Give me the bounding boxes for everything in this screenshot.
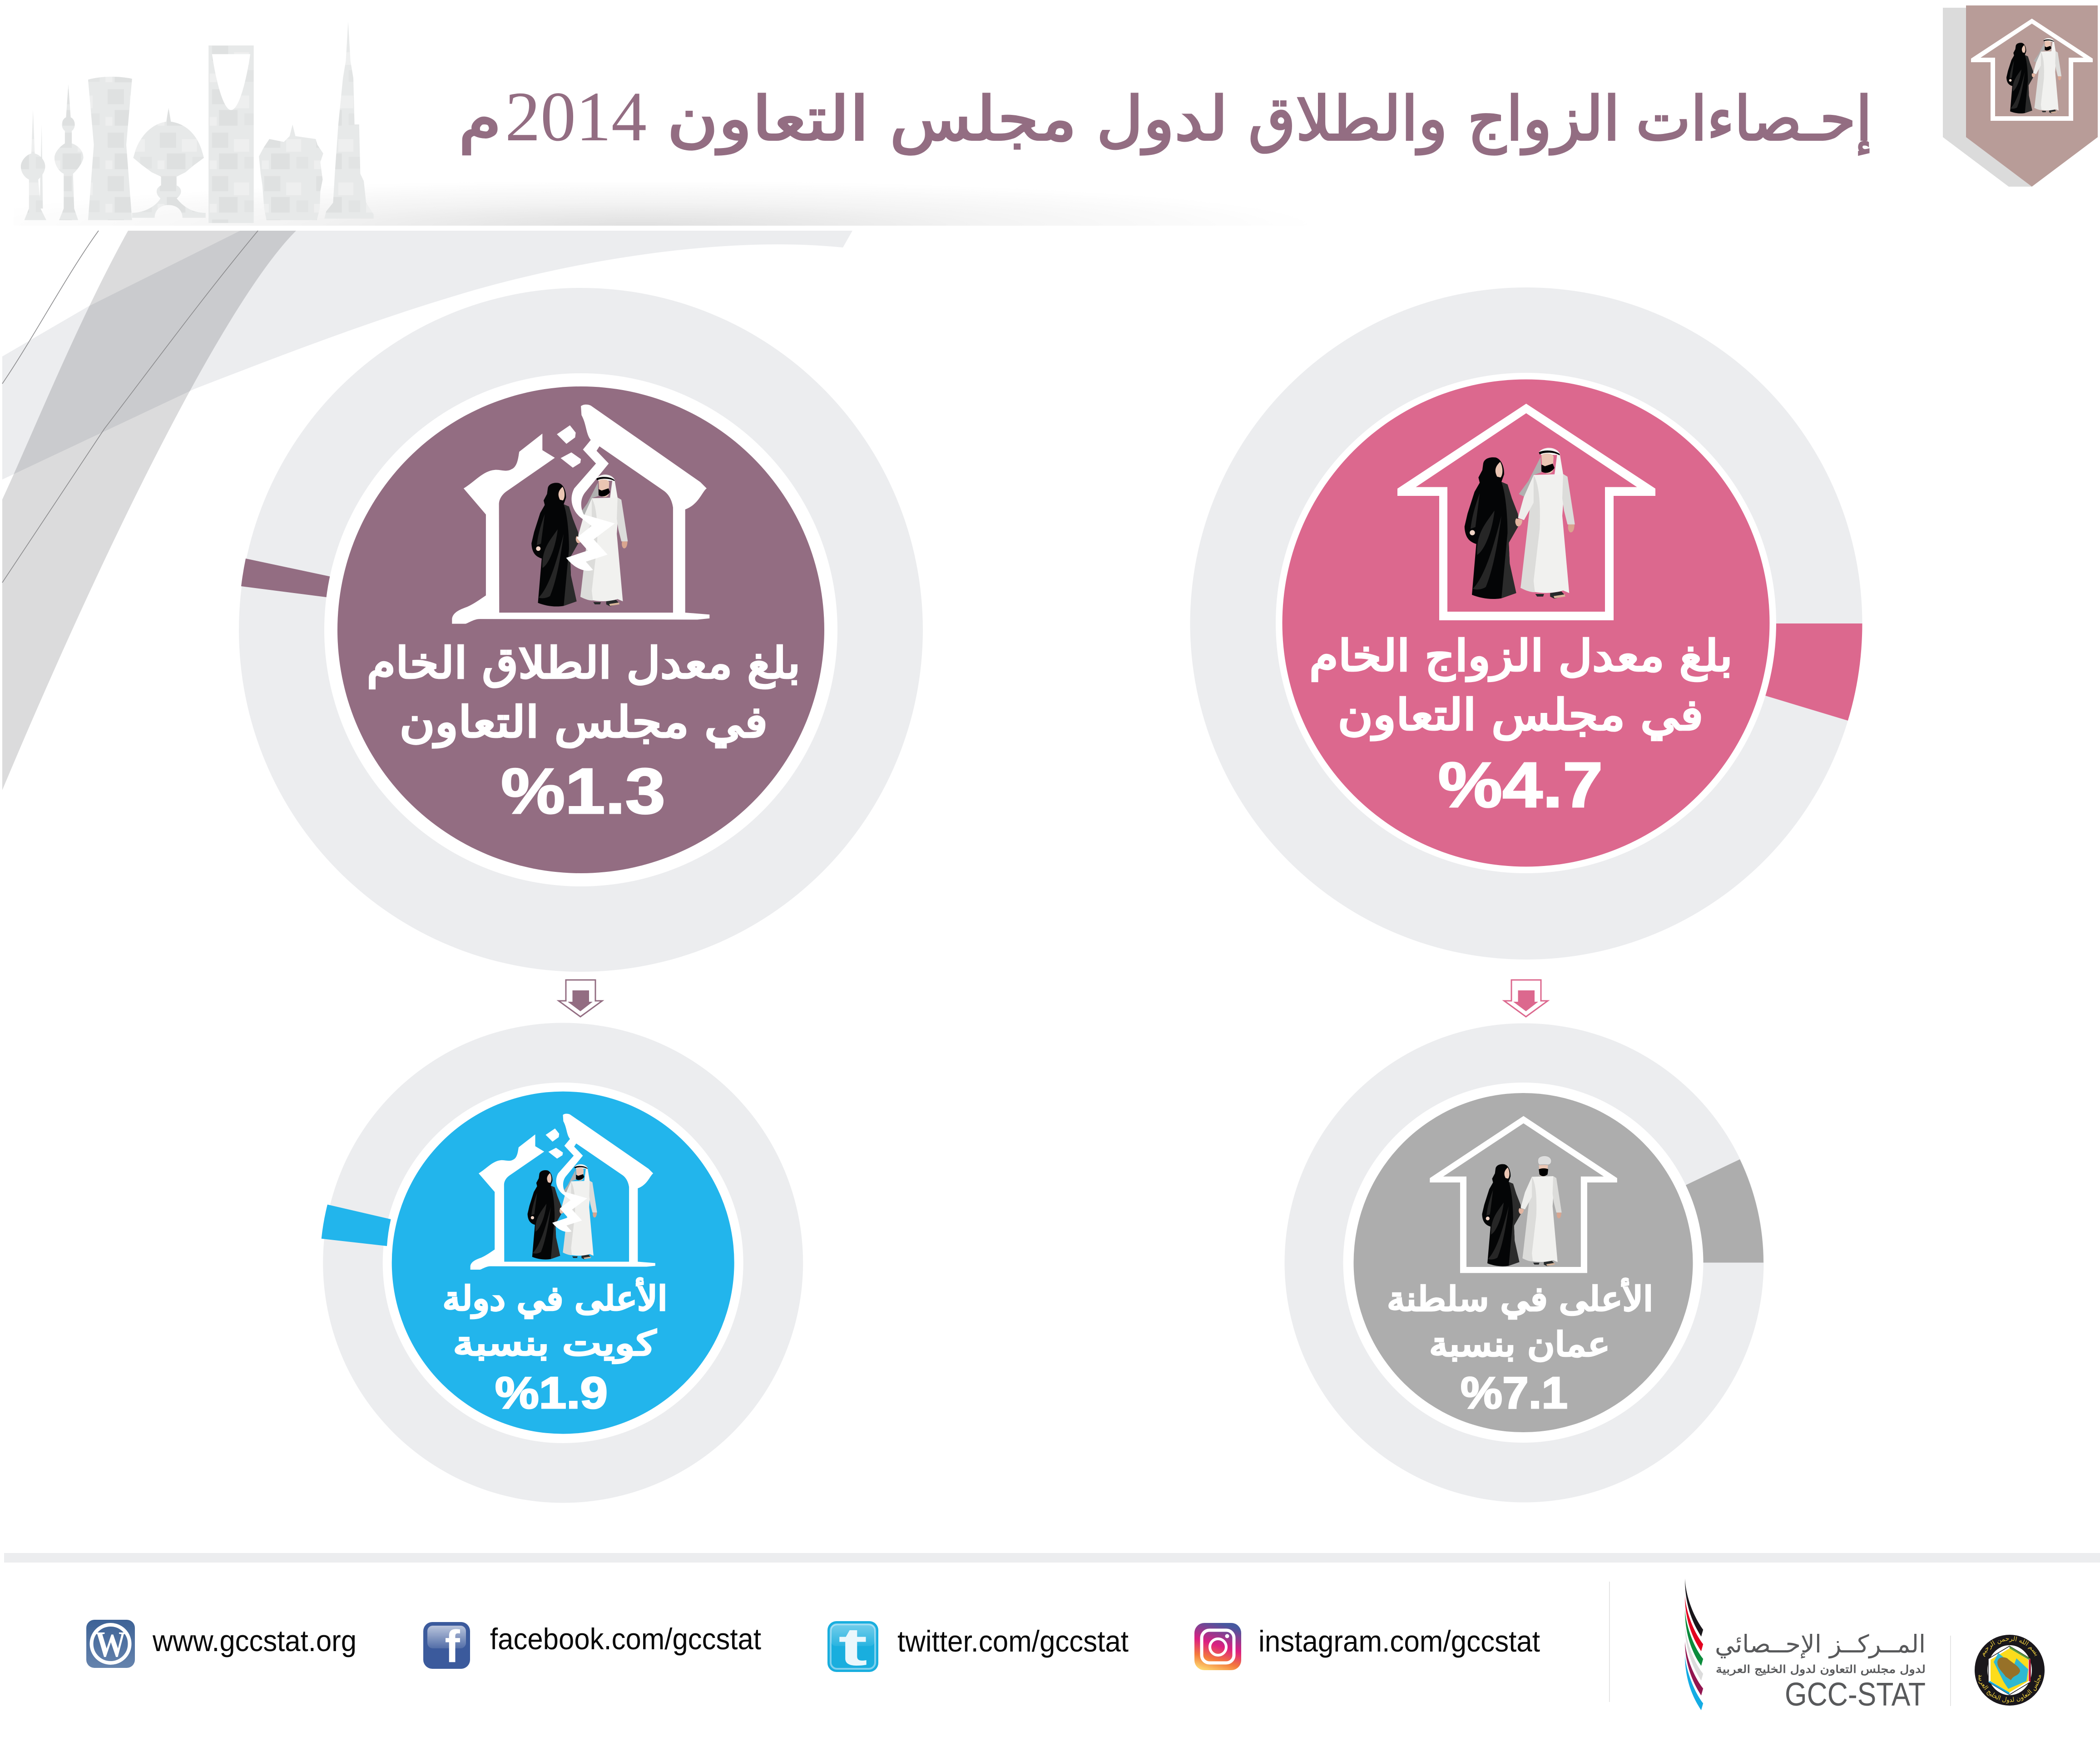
disc [337,386,824,873]
footer bar [4,1553,2100,1563]
skyline of gulf towers [21,22,374,223]
arrow: marriage to Oman [1504,980,1548,1017]
label text line 2: في مجلس التعاون [400,697,768,748]
ring track [323,1023,803,1503]
panel: marriage rate ring [1190,287,1862,960]
logo subtitle: لدول مجلس التعاون لدول الخليج العربية [1716,1663,1926,1676]
ring track [239,288,923,972]
value: %1.9 [495,1368,608,1418]
ring track [1284,1024,1764,1502]
icon: facebook [423,1621,470,1672]
label text: الأعلى في سلطنة [1387,1278,1653,1319]
icon: couple in house [1397,404,1655,620]
logo name: المــركــز الإحــصائي [1715,1630,1926,1658]
disc [1353,1093,1693,1432]
ring wedge 7.1% [1523,1159,1763,1262]
GCC emblem: مجلس التعاون لدول الخليج العربية [1976,1674,2043,1704]
ring track [1190,287,1862,960]
link: twitter: twitter.com/gccstat [897,1624,1129,1658]
title: 2014 [505,77,647,156]
title: الزواج [1467,84,1620,155]
header gradient strip [14,182,1376,226]
icon: facebook: f [445,1621,460,1672]
ring wedge 4.7% [1526,623,1862,721]
title: إحـصاءات [1636,84,1872,155]
swoosh shapes [2,231,852,790]
logo ribbons [1685,1578,1703,1710]
value: %7.1 [1461,1368,1568,1418]
link: facebook: facebook.com/gccstat [490,1622,761,1656]
icon: twitter [827,1617,878,1677]
icon: wordpress [86,1620,135,1668]
icon: couple in house [1430,1116,1617,1273]
title: لدول [1096,84,1228,155]
title [459,77,1872,156]
label text: الأعلى في دولة [442,1278,668,1318]
link: instagram: instagram.com/gccstat [1258,1624,1540,1658]
value: %1.3 [501,755,665,827]
icon: couple in broken house [471,1114,655,1270]
GCC-STAT logo [1609,1578,1951,1713]
logo latin name: GCC-STAT [1785,1677,1926,1713]
icon: instagram [1194,1623,1241,1670]
ring wedge 1.3% [241,559,581,630]
label text: بلغ معدل الزواج الخام [1309,631,1733,682]
label text line 2: كويت بنسبة [453,1324,656,1363]
header background decoration [2,22,1376,790]
panel: highest divorce Kuwait [322,1023,803,1503]
GCC emblem: بسم الله الرحمن الرحيم [1979,1635,2041,1657]
link: website: www.gccstat.org [152,1624,357,1657]
icon: twitter: t [838,1617,867,1677]
arrow: divorce to Kuwait [559,980,602,1017]
title: مجلس [890,84,1077,155]
disc [392,1092,734,1434]
icon: couple in broken house [452,405,709,624]
label text line 2: في مجلس التعاون [1338,690,1703,741]
ring wedge 1.9% [322,1205,391,1246]
panel: highest marriage Oman [1284,1024,1764,1502]
disc [1283,380,1769,866]
icon: wordpress: W [95,1625,126,1665]
label text: بلغ معدل الطلاق الخام [367,638,800,688]
title: التعاون [667,84,869,155]
GCC emblem [1975,1635,2045,1706]
header badge icon: couple in house [1943,5,2098,187]
value: %4.7 [1438,749,1603,821]
label text line 2: عمان بنسبة [1429,1325,1610,1364]
title: والطلاق [1248,84,1448,155]
title: م [459,84,501,154]
panel: divorce rate ring [239,288,923,972]
